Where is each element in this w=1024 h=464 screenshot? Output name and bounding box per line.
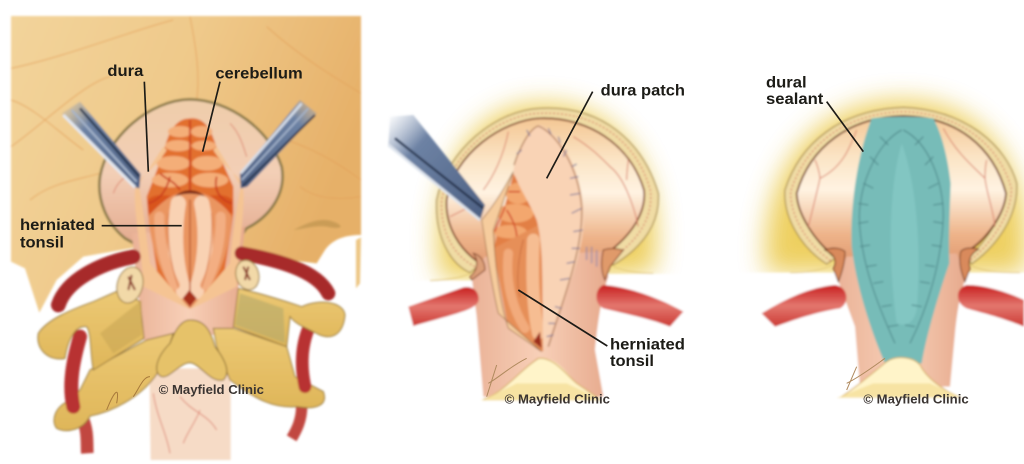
label: dura patch: dura patch [601, 82, 685, 99]
bone rim [437, 108, 658, 273]
dome [797, 116, 1006, 280]
panel: exposed tonsils [11, 16, 361, 460]
tonsil [493, 223, 543, 352]
lower bone glow [482, 383, 603, 401]
skin background [11, 16, 361, 313]
label: dura: dura [107, 63, 144, 80]
stem [472, 252, 608, 397]
tonsil stripes [159, 200, 221, 307]
white lower mask [370, 274, 698, 433]
sealant [851, 117, 951, 363]
right fold [960, 248, 978, 282]
lower bone [840, 358, 960, 397]
yellow glow [765, 100, 1024, 273]
dura fold left [470, 253, 485, 280]
leader lines and labels [20, 63, 303, 397]
dome [447, 118, 644, 283]
signature [487, 358, 527, 397]
cerebellum vessels [148, 120, 232, 203]
tonsils [148, 192, 232, 308]
label: dural: dural [766, 74, 807, 91]
label: cerebellum: cerebellum [215, 66, 303, 83]
label: tonsil: tonsil [20, 234, 64, 251]
bone rim [785, 107, 1017, 264]
label: herniated: herniated [610, 336, 685, 353]
left fold [825, 248, 845, 282]
arch shadow [175, 190, 205, 197]
tonsil tip [183, 290, 197, 307]
tonsil stripes [508, 240, 538, 333]
left retractor [62, 102, 141, 188]
shadow [235, 293, 285, 343]
suture line [514, 126, 582, 347]
dura fold right [602, 249, 623, 280]
label: sealant: sealant [766, 91, 823, 108]
artery right [596, 285, 683, 327]
left flap [482, 172, 542, 352]
left dura flap [135, 147, 190, 309]
cerebellum lower band [147, 195, 233, 213]
right retractor [240, 100, 317, 188]
sutures [517, 128, 583, 337]
retractor [388, 115, 485, 221]
dome outline [99, 99, 283, 247]
dome vessels [450, 132, 638, 227]
bone rim edge [790, 265, 1020, 273]
facet left [113, 264, 147, 306]
central spinous process [157, 320, 227, 380]
bruise [587, 247, 597, 267]
dome vessels [808, 128, 995, 227]
leader line and labels [766, 74, 969, 406]
rim dots [442, 113, 651, 267]
panel: dura patch [370, 82, 698, 433]
lower bone glow [837, 383, 963, 398]
copyright: © Mayfield Clinic [159, 383, 264, 397]
lower bone [480, 358, 600, 400]
white lower mask [707, 273, 1024, 433]
right dura flap [190, 147, 244, 309]
skin veins [11, 17, 361, 200]
skin sliver right [356, 237, 361, 288]
cerebellum folds [152, 126, 228, 187]
facet marks [128, 267, 250, 290]
cerebellum vessels [495, 192, 520, 237]
stem [837, 253, 967, 387]
rim dots [791, 112, 1011, 261]
artery left [762, 285, 846, 327]
sealant sutures [858, 130, 943, 343]
facet right [233, 258, 262, 292]
signature [107, 377, 150, 410]
copyright: © Mayfield Clinic [863, 392, 969, 406]
left wing bone [38, 290, 144, 370]
patch [513, 125, 584, 352]
artery left [408, 287, 479, 326]
label: herniated: herniated [20, 217, 95, 234]
upper arteries [58, 257, 133, 305]
opening [493, 173, 542, 352]
right wing bone [233, 288, 345, 347]
skin shadow [293, 220, 341, 230]
sealant highlight [891, 143, 919, 325]
dome vessels [113, 123, 247, 193]
lateral arteries [71, 337, 80, 407]
leader lines and labels [505, 82, 685, 406]
yellow glow [437, 103, 657, 280]
cerebellum folds [493, 183, 534, 238]
right lower bone [213, 328, 324, 408]
artery right [958, 285, 1024, 327]
spinal cord bottom [149, 368, 231, 460]
cord vessels [153, 393, 217, 453]
tonsil tip [533, 332, 542, 348]
label: tonsil: tonsil [610, 353, 654, 370]
left lower bone [54, 333, 173, 431]
copyright: © Mayfield Clinic [505, 392, 610, 406]
lower left arteries [82, 417, 87, 453]
signature [847, 358, 885, 390]
panel: dural sealant [707, 74, 1024, 433]
bone rim edge [430, 267, 653, 281]
spinal stem [132, 227, 245, 340]
cerebellum [147, 118, 233, 308]
